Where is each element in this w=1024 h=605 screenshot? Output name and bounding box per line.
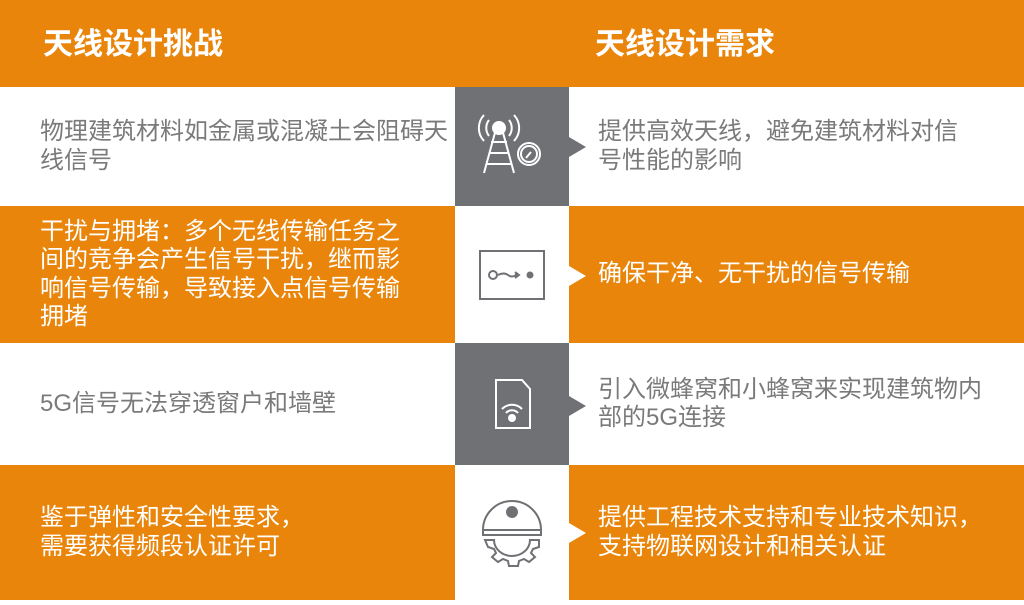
text: challenge 4: 需要获得频段认证许可: [40, 532, 280, 560]
arrow row1: [569, 137, 586, 157]
arrow row2: [569, 266, 586, 286]
text: requirement 4: [598, 504, 982, 560]
header bar: [0, 0, 1024, 87]
center cell row2: [455, 206, 569, 343]
center cell row4: [455, 465, 569, 600]
text: challenge 4: [40, 504, 304, 560]
center cell row1: [455, 87, 569, 206]
center cell row3: [455, 343, 569, 465]
text: requirement 2: 确保干净、无干扰的信号传输: [598, 260, 910, 287]
arrow row3: [569, 396, 586, 416]
text: challenge 1: 物理建筑材料如金属或混凝土会阻碍天线信号: [40, 118, 448, 174]
row 4 background: [0, 465, 1024, 600]
text: challenge 3: 5G信号无法穿透窗户和墙壁: [40, 390, 336, 417]
heading: challenges: 天线设计挑战: [43, 28, 223, 61]
text: requirement 4: 支持物联网设计和相关认证: [598, 532, 886, 560]
text: requirement 1: 提供高效天线，避免建筑材料对信号性能的影响: [598, 118, 958, 174]
text: requirement 3: 引入微蜂窝和小蜂窝来实现建筑物内部的5G连接: [598, 376, 982, 431]
text: challenge 4: 鉴于弹性和安全性要求，: [40, 504, 304, 531]
text: challenge 2: 干扰与拥堵：多个无线传输任务之间的竞争会产生信号干扰，继而影响信号传输，导致接入点信号传输拥堵: [40, 218, 400, 330]
heading: requirements: 天线设计需求: [595, 28, 775, 61]
arrow row4: [569, 523, 586, 543]
text: requirement 4: 提供工程技术支持和专业技术知识，: [598, 504, 982, 531]
row 2 background: [0, 206, 1024, 343]
